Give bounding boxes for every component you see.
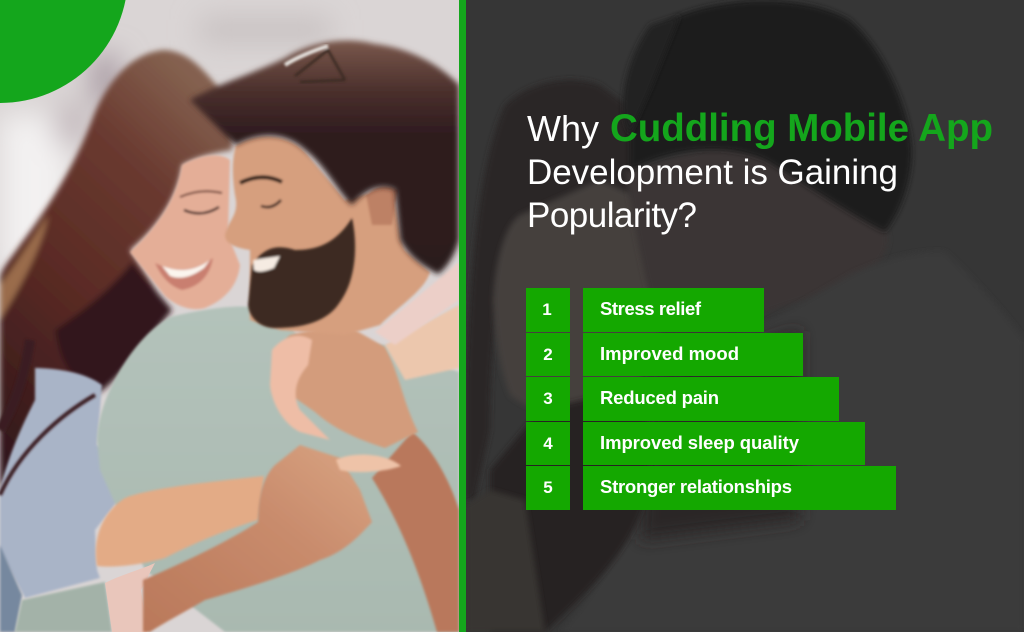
item 2: improved mood: 2 — [543, 345, 553, 364]
woman: hair — [0, 50, 232, 490]
woman: upper arm behind — [385, 305, 459, 380]
man: collar — [375, 262, 459, 345]
list of reasons — [526, 288, 896, 510]
item 4: improved sleep quality: Improved sleep quality — [600, 432, 800, 453]
title — [527, 107, 993, 235]
item 4: improved sleep quality — [526, 422, 865, 465]
dark photo: woman's arm — [488, 490, 545, 631]
man: arm and lower hand — [143, 445, 372, 632]
title: Cuddling Mobile App — [610, 107, 993, 150]
item 3: reduced pain: 3 — [543, 389, 553, 408]
panel: dark photo background — [466, 0, 1024, 632]
panel: couple photo — [0, 0, 459, 632]
man: sweater — [97, 307, 459, 632]
title: Why — [527, 108, 599, 149]
dark photo: woman's hair — [466, 80, 640, 500]
item 3: reduced pain — [526, 377, 839, 421]
dark photo: shirt centre shadow — [640, 330, 800, 540]
item 1: stress relief — [526, 288, 764, 332]
item 5: stronger relationships: Stronger relationships — [600, 476, 792, 497]
dark photo: man's shirt — [811, 302, 812, 303]
item 5: stronger relationships: 5 — [543, 478, 553, 497]
dark photo: hair wisps — [622, 16, 676, 107]
item 3: reduced pain: Reduced pain — [600, 387, 719, 408]
item 2: improved mood — [526, 333, 803, 376]
item 1: stress relief: 1 — [542, 300, 552, 319]
woman: forearm — [96, 476, 264, 567]
woman: denim shirt — [0, 366, 116, 598]
man: hair — [190, 40, 459, 274]
divider: green vertical bar — [459, 0, 466, 632]
woman: face — [130, 155, 240, 309]
woman: dark denim lower — [0, 545, 22, 632]
man: right forearm — [372, 432, 459, 632]
dark photo: woman's face — [493, 180, 670, 414]
dark photo: woman's lower body — [490, 385, 650, 632]
dark photo: man's hair — [629, 1, 912, 232]
item 2: improved mood: Improved mood — [600, 343, 739, 364]
sunglasses on head — [285, 46, 345, 82]
item 5: stronger relationships — [526, 466, 896, 510]
item 1: stress relief: Stress relief — [600, 298, 702, 319]
man: sleeve — [15, 582, 112, 632]
man: cuff — [105, 563, 155, 632]
badge: green corner circle — [0, 0, 128, 103]
item 4: improved sleep quality: 4 — [543, 434, 553, 453]
title: Popularity? — [527, 196, 697, 235]
title: Development is Gaining — [527, 153, 898, 192]
man: beard — [248, 218, 355, 328]
woman: hair strands over shirt — [0, 340, 95, 495]
man: face — [225, 136, 430, 335]
photo background blur — [0, 18, 330, 275]
clasped hands — [270, 328, 418, 472]
dark photo: man's face and neck — [626, 170, 667, 288]
